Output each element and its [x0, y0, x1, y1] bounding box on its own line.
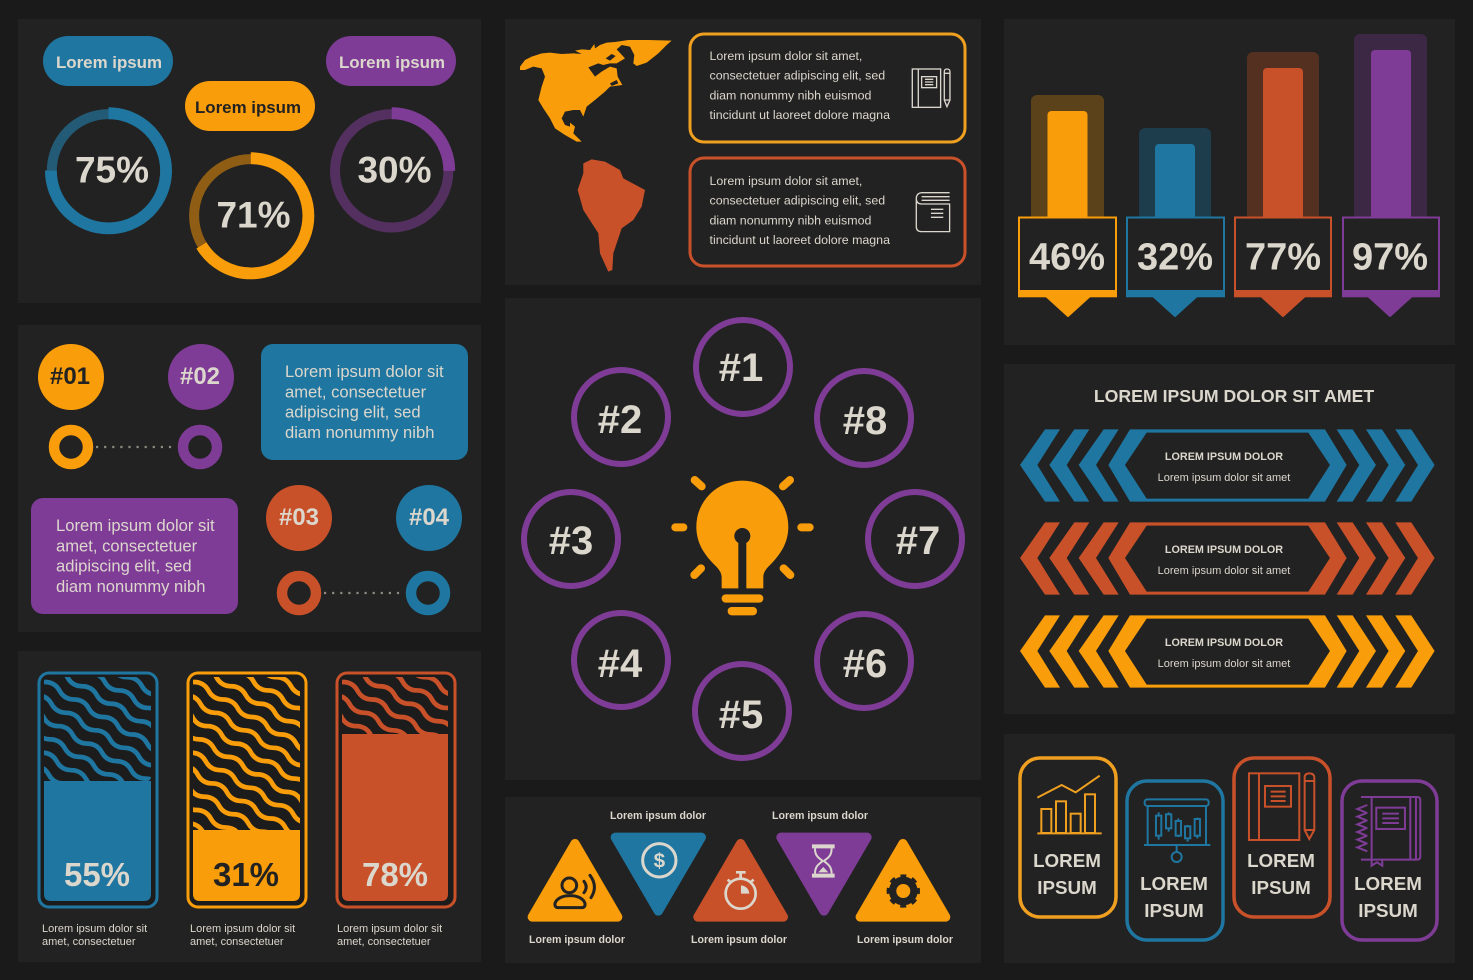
- text box: blue: Lorem ipsum dolor sit: [285, 362, 444, 381]
- triangle: stopwatch: [698, 844, 783, 917]
- banner: blue: [1020, 429, 1435, 502]
- node #3: #3: [549, 519, 593, 563]
- text box: red: [690, 158, 965, 266]
- banner: red: Lorem ipsum dolor sit amet: [1158, 565, 1290, 577]
- text box: blue: adipiscing elit, sed: [285, 403, 421, 422]
- banner: blue: Lorem ipsum dolor sit amet: [1158, 472, 1290, 484]
- node #8: [817, 371, 911, 465]
- text box: purple: Lorem ipsum dolor sit: [56, 516, 215, 535]
- node #2: #2: [598, 398, 642, 442]
- node #1: #1: [719, 346, 763, 390]
- node #1: [696, 320, 790, 414]
- node #7: [868, 492, 962, 586]
- triangle labels: Lorem ipsum dolor: [610, 810, 706, 822]
- panel: fill gauges: [38, 672, 456, 946]
- panel: americas map: [505, 19, 981, 285]
- connector rings 3-4: [282, 576, 445, 610]
- card: spiral journal: [1342, 781, 1437, 940]
- bar: 97%: [1342, 34, 1440, 316]
- panel: triangle icons: [505, 797, 981, 963]
- card: spiral journal: LOREM: [1354, 873, 1422, 894]
- text box: orange: diam nonummy nibh euismod: [710, 88, 871, 102]
- gauge: 55%: 55%: [64, 856, 130, 893]
- card: growth chart: [1020, 758, 1116, 917]
- node #8: #8: [843, 399, 887, 443]
- card: growth chart: LOREM: [1033, 850, 1101, 871]
- banner: red: LOREM IPSUM DOLOR: [1165, 544, 1283, 556]
- panel: icon cards: [1004, 734, 1455, 963]
- donut: 71%: [193, 158, 308, 273]
- step #02: #02: [180, 363, 220, 390]
- banner: blue: LOREM IPSUM DOLOR: [1165, 451, 1283, 463]
- text box: red: diam nonummy nibh euismod: [710, 213, 871, 227]
- icon: lightbulb: [675, 480, 810, 615]
- node #4: #4: [598, 642, 643, 686]
- card: presentation board: LOREM: [1140, 873, 1208, 894]
- icon: notebook and pencil: [912, 69, 950, 107]
- text box: purple: adipiscing elit, sed: [56, 557, 192, 576]
- banner: orange: [1020, 615, 1435, 688]
- icon: book: [916, 193, 950, 232]
- node #5: [695, 664, 789, 758]
- donut: 75%: 75%: [75, 150, 149, 191]
- gauge: 55%: [38, 672, 158, 908]
- node #7: #7: [896, 519, 940, 563]
- node #6: #6: [843, 642, 887, 686]
- node #6: [817, 614, 911, 708]
- captions: amet, consectetuer: [42, 936, 136, 948]
- pill label: orange: [185, 81, 315, 131]
- heading: LOREM IPSUM DOLOR SIT AMET: [1094, 386, 1374, 406]
- triangle: hourglass: [781, 837, 867, 911]
- donut: 30%: [334, 113, 449, 228]
- card: presentation board: IPSUM: [1144, 900, 1204, 921]
- panel: numbered steps: [18, 325, 481, 632]
- text box: red: consectetuer adipiscing elit, sed: [710, 194, 885, 208]
- triangle labels: Lorem ipsum dolor: [691, 934, 787, 946]
- pill label: orange: Lorem ipsum: [195, 98, 301, 117]
- text box: red: Lorem ipsum dolor sit amet,: [710, 174, 862, 188]
- donut: 30%: 30%: [357, 150, 432, 191]
- bar: 46%: [1018, 95, 1117, 316]
- node #2: [574, 370, 668, 464]
- donut: 71%: 71%: [216, 195, 291, 236]
- triangle: dollar coin: [615, 837, 701, 911]
- card: growth chart: IPSUM: [1037, 877, 1097, 898]
- triangle: dollar coin: $: [654, 850, 666, 873]
- node #4: [574, 613, 668, 707]
- triangle: person speaking: [532, 844, 618, 917]
- text box: orange: Lorem ipsum dolor sit amet,: [710, 49, 862, 63]
- triangle labels: Lorem ipsum dolor: [529, 934, 625, 946]
- pill label: purple: Lorem ipsum: [339, 53, 445, 72]
- text box: blue: [261, 344, 468, 460]
- step #03: [266, 485, 332, 551]
- bar: 97%: 97%: [1352, 236, 1428, 278]
- step #02: [168, 344, 234, 410]
- card: presentation board: [1127, 781, 1223, 940]
- bar: 77%: 77%: [1245, 236, 1321, 278]
- step #01: [38, 344, 104, 410]
- banner: red: [1020, 522, 1435, 595]
- captions: amet, consectetuer: [190, 936, 284, 948]
- banner: orange: Lorem ipsum dolor sit amet: [1158, 658, 1290, 670]
- node #5: #5: [719, 693, 763, 737]
- gauge: 78%: [336, 672, 456, 908]
- pill label: blue: [43, 36, 173, 86]
- panel: chevron banners: [1004, 364, 1455, 714]
- captions: [42, 923, 442, 948]
- triangle labels: Lorem ipsum dolor: [857, 934, 953, 946]
- text box: purple: [31, 498, 238, 614]
- bar: 32%: [1126, 128, 1225, 316]
- card: notebook and pencil: IPSUM: [1251, 877, 1311, 898]
- captions: Lorem ipsum dolor sit: [337, 923, 442, 935]
- card: spiral journal: IPSUM: [1358, 900, 1418, 921]
- text box: orange: consectetuer adipiscing elit, sed: [710, 69, 885, 83]
- card: notebook and pencil: LOREM: [1247, 850, 1315, 871]
- banner: orange: LOREM IPSUM DOLOR: [1165, 637, 1283, 649]
- step #03: #03: [279, 504, 319, 531]
- step #04: [396, 485, 462, 551]
- node #3: [524, 492, 618, 586]
- captions: Lorem ipsum dolor sit: [190, 923, 295, 935]
- step #01: #01: [50, 363, 90, 390]
- step #04: #04: [409, 504, 450, 531]
- panel: percentage bars: [1004, 19, 1455, 345]
- text box: blue: amet, consectetuer: [285, 382, 427, 401]
- map: North America: [520, 40, 672, 142]
- panel: lightbulb ring: [505, 298, 981, 780]
- pill label: purple: [326, 36, 456, 86]
- text box: red: tincidunt ut laoreet dolore magna: [710, 233, 890, 247]
- gauge: 78%: 78%: [362, 856, 428, 893]
- pill label: blue: Lorem ipsum: [56, 53, 162, 72]
- triangle labels: Lorem ipsum dolor: [772, 810, 868, 822]
- captions: amet, consectetuer: [337, 936, 431, 948]
- text box: orange: tincidunt ut laoreet dolore magna: [710, 108, 890, 122]
- text box: blue: diam nonummy nibh: [285, 423, 434, 442]
- text box: purple: diam nonummy nibh: [56, 577, 205, 596]
- text box: orange: [690, 34, 965, 142]
- triangle labels: [529, 810, 953, 946]
- connector rings 1-2: [54, 430, 217, 464]
- donut: 75%: [51, 113, 166, 228]
- bar: 32%: 32%: [1137, 236, 1213, 278]
- bar: 46%: 46%: [1029, 236, 1105, 278]
- card: notebook and pencil: [1234, 758, 1330, 917]
- text box: purple: amet, consectetuer: [56, 536, 198, 555]
- bar: 77%: [1234, 52, 1332, 316]
- map: South America: [578, 159, 645, 272]
- triangle: gear: [860, 844, 946, 917]
- gauge: 31%: [186, 672, 308, 908]
- gauge: 31%: 31%: [213, 856, 279, 893]
- panel: donut charts: [18, 19, 481, 303]
- captions: Lorem ipsum dolor sit: [42, 923, 147, 935]
